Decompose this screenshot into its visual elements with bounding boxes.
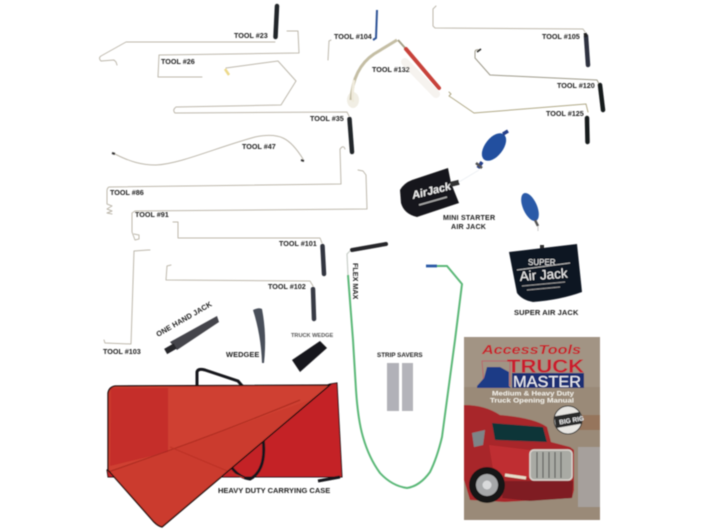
tool 102 bbox=[166, 265, 314, 319]
icon: blue pump bulb bbox=[476, 129, 511, 168]
tool 101 bbox=[173, 222, 324, 274]
heavy duty carrying case: HEAVY DUTY CARRYING CASE bbox=[218, 486, 330, 495]
manual title block: TRUCK bbox=[507, 356, 584, 376]
manual logo: AccessTools bbox=[481, 343, 581, 357]
one hand jack bbox=[154, 299, 219, 354]
manual big rig badge bbox=[554, 406, 585, 434]
tool 103 bbox=[103, 250, 150, 356]
super air jack: SUPER bbox=[528, 258, 556, 267]
heavy duty carrying case bbox=[107, 369, 342, 527]
tool 35 bbox=[310, 114, 352, 152]
manual big rig badge: BIG RIG bbox=[559, 415, 585, 426]
truck master manual cover: Truck Opening Manual bbox=[490, 398, 574, 404]
manual red truck bbox=[464, 405, 574, 503]
tool 125: TOOL #125 bbox=[546, 109, 584, 118]
tool 104 bbox=[328, 10, 377, 60]
tool 132 bbox=[347, 40, 439, 108]
mini starter air jack: AirJack bbox=[410, 180, 453, 202]
super air jack bbox=[509, 244, 582, 317]
tool 103: TOOL #103 bbox=[103, 347, 141, 356]
wedgee bbox=[226, 308, 265, 363]
one hand jack: ONE HAND JACK bbox=[154, 299, 214, 339]
strip savers bbox=[377, 352, 423, 411]
tool 105: TOOL #105 bbox=[542, 32, 580, 41]
mini starter air jack: AIR JACK bbox=[451, 223, 487, 231]
manual subtitle: Medium & Heavy Duty bbox=[492, 390, 574, 398]
mini starter air jack: MINI STARTER bbox=[443, 214, 495, 222]
tool 23: TOOL #23 bbox=[234, 31, 268, 40]
tool 86: TOOL #86 bbox=[110, 188, 144, 197]
flex max bbox=[347, 244, 462, 488]
tool 120 bbox=[475, 49, 603, 110]
truck wedge: TRUCK WEDGE bbox=[291, 333, 334, 339]
manual title block bbox=[477, 356, 584, 391]
strip savers: STRIP SAVERS bbox=[377, 352, 423, 359]
mini starter air jack bbox=[400, 129, 511, 231]
tool 132: TOOL #132 bbox=[372, 65, 410, 74]
tool 23 bbox=[100, 6, 277, 65]
flex max: FLEX MAX bbox=[351, 263, 360, 300]
icon: super air jack bulb bbox=[518, 190, 542, 231]
tool 101: TOOL #101 bbox=[279, 239, 317, 248]
truck wedge bbox=[291, 333, 334, 372]
tool 91 bbox=[132, 170, 367, 240]
tool 86 bbox=[107, 147, 345, 214]
tool 102: TOOL #102 bbox=[268, 282, 306, 291]
truck master manual cover bbox=[464, 337, 600, 520]
tool 47: TOOL #47 bbox=[242, 142, 276, 151]
tool 105 bbox=[433, 6, 588, 65]
manual title block: MASTER bbox=[513, 374, 581, 391]
tool 120: TOOL #120 bbox=[557, 81, 595, 90]
tool 91: TOOL #91 bbox=[135, 210, 169, 219]
tool 104: TOOL #104 bbox=[334, 32, 372, 41]
super air jack: Air Jack bbox=[519, 266, 568, 284]
tool 26 bbox=[158, 31, 349, 116]
super air jack: SUPER AIR JACK bbox=[514, 308, 579, 317]
tool 47 bbox=[112, 135, 304, 165]
tool 26: TOOL #26 bbox=[161, 57, 195, 66]
tool 125 bbox=[449, 92, 588, 142]
tool 35: TOOL #35 bbox=[310, 114, 344, 123]
wedgee: WEDGEE bbox=[226, 350, 259, 359]
